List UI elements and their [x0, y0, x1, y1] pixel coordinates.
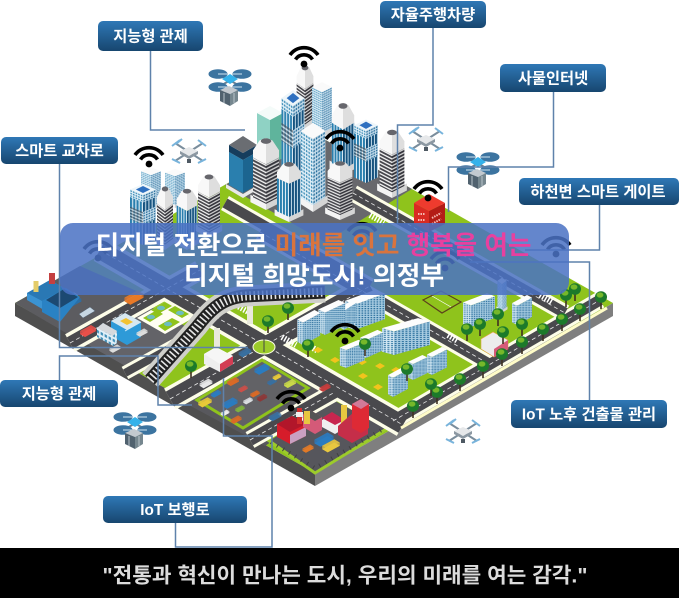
- label: smart intersection: 스마트 교차로: [15, 143, 104, 160]
- parking lot: [197, 360, 308, 428]
- label: intelligent control, top: [98, 21, 203, 51]
- headline line 1: 디지털 전환으로 미래를 잇고 행복을 여는: [96, 231, 531, 260]
- label: IoT old building management: [511, 400, 667, 428]
- drone: camera, right: [409, 127, 443, 151]
- wifi signals: [84, 48, 570, 411]
- drone: camera, bottom right: [446, 419, 480, 443]
- factory yard, bottom: [268, 398, 388, 473]
- label: riverside smart gate: [519, 178, 679, 205]
- drone: delivery, right: [456, 152, 500, 189]
- apartment blocks: [297, 278, 532, 397]
- isometric city platform: [15, 65, 613, 486]
- drone: delivery, top: [208, 69, 252, 106]
- leader lines: [60, 28, 600, 547]
- drone: delivery, bottom left: [114, 412, 156, 449]
- platform lawn surface: [15, 134, 613, 473]
- label: internet of things: [500, 64, 606, 92]
- factories, bottom: [277, 399, 369, 453]
- wifi icon, apartments: [331, 325, 359, 344]
- roundabout: [253, 336, 275, 354]
- tower district ground: [225, 134, 412, 242]
- wifi icon, top tower: [290, 48, 318, 67]
- wifi icon, under banner top: [348, 224, 376, 243]
- roads: [70, 193, 607, 440]
- label: intelligent control, lower: 지능형 관제: [22, 386, 96, 403]
- wifi icon, under banner left: [84, 242, 112, 261]
- elevated rail viaduct: [150, 292, 325, 380]
- label: intelligent control, top: 지능형 관제: [113, 28, 188, 46]
- hospital block ground: [85, 306, 192, 367]
- soccer field: [423, 291, 461, 313]
- label: IoT walkway: [103, 496, 247, 523]
- white kerbs: [70, 193, 600, 440]
- label: autonomous vehicles: [380, 1, 486, 28]
- wifi icon, factory: [277, 392, 305, 411]
- label: IoT old building management: IoT 노후 건출물 관리: [522, 406, 656, 424]
- hospital building: [97, 313, 148, 353]
- label: riverside smart gate: 하천변 스마트 게이트: [530, 184, 666, 201]
- park block: [137, 302, 193, 334]
- edge strip: [401, 308, 607, 428]
- label: smart intersection: [1, 137, 118, 164]
- label: internet of things: 사물인터넷: [518, 70, 588, 88]
- title banner: [60, 223, 569, 295]
- centre dashes: [70, 193, 600, 440]
- parking surface: [197, 360, 308, 428]
- drones: [114, 69, 500, 449]
- banner panel: [60, 223, 569, 295]
- mint tower: [257, 106, 283, 165]
- trees: [185, 283, 607, 418]
- tower cluster, centre: [226, 65, 407, 222]
- wifi icon, centre tower: [326, 132, 354, 151]
- wifi icon, under banner right: [542, 238, 570, 257]
- small shops: [204, 332, 508, 372]
- dark blue tower: [226, 136, 260, 198]
- parked cars: [198, 363, 296, 424]
- road vehicles: [66, 290, 331, 421]
- perimeter fence: [271, 428, 385, 468]
- blue factory, left: [27, 273, 95, 322]
- parking and lower ground: [172, 350, 340, 446]
- footer slogan: "전통과 혁신이 만나는 도시, 우리의 미래를 여는 감각.": [103, 564, 587, 588]
- asphalt: [70, 193, 600, 440]
- label: IoT walkway: IoT 보행로: [140, 502, 210, 519]
- label: intelligent control, lower: [0, 380, 118, 407]
- label: autonomous vehicles: 자율주행차량: [391, 7, 475, 24]
- headline line 2: 디지털 희망도시! 의정부: [184, 262, 444, 290]
- footer bar: [0, 548, 679, 598]
- wifi icon, left cluster: [135, 148, 163, 167]
- platform side faces: [15, 303, 613, 486]
- crosswalks: [212, 215, 552, 362]
- tower cluster, left: [130, 167, 222, 250]
- red building: [414, 194, 445, 232]
- drone: camera, left: [172, 139, 206, 163]
- yellow plaza patches: [313, 347, 401, 390]
- wifi icon, under banner middle: [431, 252, 459, 271]
- wifi icon, red building: [414, 182, 442, 201]
- factory yard, left: [15, 266, 141, 340]
- viaduct pillars: [214, 305, 253, 348]
